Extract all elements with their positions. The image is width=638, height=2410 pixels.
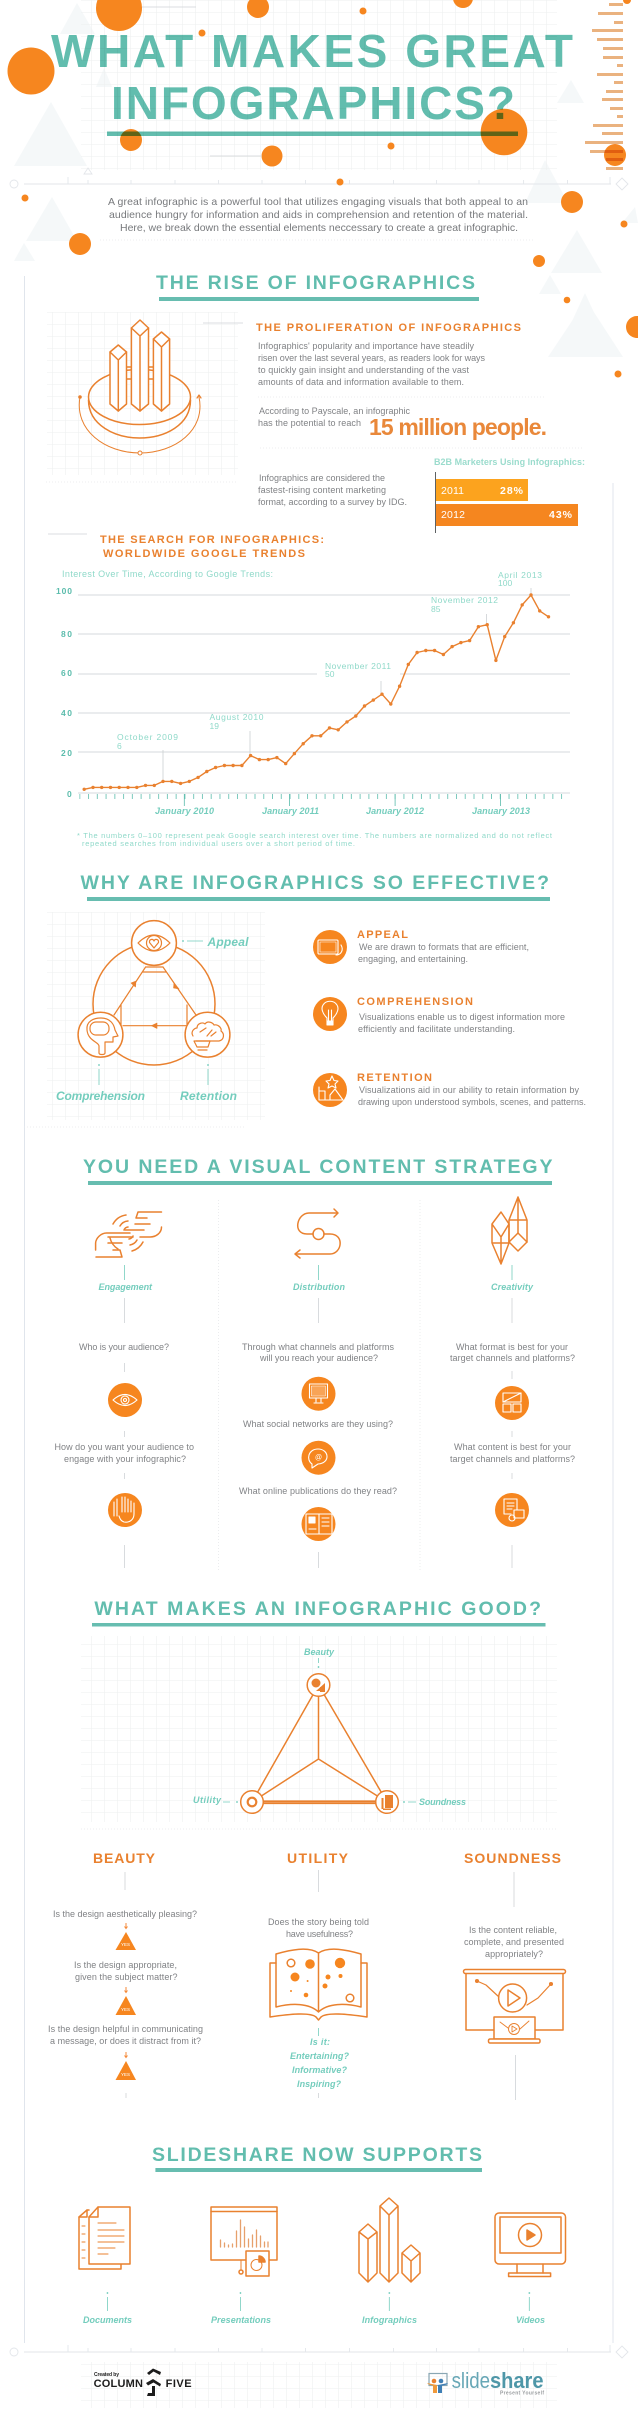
label: distribution: Distribution: [293, 1282, 346, 1292]
question: content: What content is best for your: [454, 1442, 571, 1452]
bar chart: B2B marketers: 28%: [500, 485, 524, 497]
diagram labels: [56, 935, 249, 1103]
icon: beauty shapes: [312, 1678, 325, 1692]
side bar pattern: [585, 3, 623, 170]
bar chart: B2B marketers: 2012: [441, 509, 465, 521]
pyramid labels: Soundness: [419, 1797, 466, 1807]
big stat: 15 million people.: [369, 414, 547, 440]
icon: screen with video: [464, 1970, 566, 2043]
question 3: [48, 2024, 203, 2046]
icon: retention scene: [313, 1073, 347, 1107]
data line: [84, 595, 548, 789]
diagram labels: Retention: [180, 1089, 237, 1103]
data annotations: [117, 570, 542, 751]
question: complete, and presented: [464, 1937, 564, 1947]
chart footnote: * The numbers 0–100 represent peak Google search interest over time. The numbers are normalized and do not reflect: [77, 831, 553, 840]
icon: documents: [79, 2207, 130, 2269]
questions list: Informative?: [292, 2065, 348, 2075]
bar chart: B2B marketers: 2011: [441, 485, 464, 497]
question 2: given the subject matter?: [75, 1972, 178, 1982]
comprehension text: COMPREHENSION: [357, 996, 473, 1008]
icon: hand: [108, 1493, 142, 1527]
icon: brain: [192, 1022, 223, 1050]
panel: creativity column: [450, 1197, 575, 1568]
data annotations: April 2013: [498, 570, 542, 580]
logo: column five: Created by: [94, 2372, 119, 2378]
panel: distribution column: [239, 1209, 397, 1568]
question: Does the story being told: [268, 1917, 369, 1927]
heading: visual content strategy: YOU NEED A VISUAL CONTENT STRATEGY: [83, 1156, 552, 1178]
icon: eye: [108, 1383, 142, 1417]
search heading: THE SEARCH FOR INFOGRAPHICS:: [100, 534, 324, 546]
question: content: target channels and platforms?: [450, 1454, 575, 1464]
search heading: WORLDWIDE GOOGLE TRENDS: [103, 548, 305, 560]
icon: book stack: [382, 1795, 393, 1810]
logo: column five: FIVE: [166, 2378, 192, 2390]
question: appropriately?: [485, 1949, 543, 1959]
y axis labels: 80: [61, 629, 72, 639]
icon: eye: [138, 935, 170, 951]
bottom ruler: [10, 2345, 628, 2358]
y axis labels: 60: [61, 668, 72, 678]
support labels: Videos: [516, 2315, 545, 2325]
label: creativity: Creativity: [491, 1282, 534, 1292]
beauty heading: BEAUTY: [93, 1850, 156, 1866]
proliferation text: to quickly gain insight and understanding of the vast: [258, 365, 469, 375]
y axis labels: [56, 586, 72, 799]
intro paragraph: [108, 196, 528, 234]
callout line: [203, 322, 243, 324]
question: format: [450, 1342, 575, 1363]
question 2: Is the design appropriate,: [74, 1960, 177, 1970]
intro paragraph: Here, we break down the essential elements neccessary to create a great infographic.: [120, 222, 518, 234]
question: channels: [242, 1342, 394, 1363]
data annotations: August 2010: [210, 712, 264, 722]
appeal text: We are drawn to formats that are efficient,: [359, 942, 529, 952]
intro paragraph: audience hungry for information and aids in comprehension and retention of the material.: [109, 209, 528, 221]
line chart: google trends: [56, 570, 570, 816]
x axis labels: [155, 806, 530, 816]
retention text: Visualizations aid in our ability to retain information by: [359, 1085, 580, 1095]
icon: layout: [495, 1386, 529, 1420]
icon: speech bubble: @: [315, 1454, 322, 1462]
background triangles: [14, 3, 638, 357]
y axis labels: 20: [61, 748, 72, 758]
questions list: [290, 2037, 350, 2089]
footer grid: [81, 2362, 557, 2408]
label: engagement: Engagement: [98, 1282, 153, 1292]
y axis labels: 100: [56, 586, 72, 596]
question: Is the content reliable,: [469, 1925, 557, 1935]
panel: utility: [268, 1850, 369, 2098]
question 2: [74, 1960, 178, 1982]
payscale text: According to Payscale, an infographic: [259, 406, 410, 416]
icon: magazine: [302, 1507, 336, 1541]
icon: comprehension bulb: [313, 997, 347, 1031]
page frame lines: [24, 276, 613, 2343]
heading: the rise of infographics: THE RISE OF INFOGRAPHICS: [156, 272, 475, 294]
retention text: RETENTION: [357, 1072, 432, 1084]
proliferation text: Infographics' popularity and importance have steadily: [258, 341, 474, 351]
appeal text: APPEAL: [357, 929, 408, 941]
diagram: pyramid: [241, 1674, 398, 1813]
icon: head: [87, 1018, 118, 1054]
bar chart: B2B marketers: [436, 472, 578, 533]
comprehension text: Visualizations enable us to digest information more: [359, 1012, 565, 1022]
question: format: target channels and platforms?: [450, 1353, 575, 1363]
logo: slideshare: [427, 2368, 544, 2396]
heading: what makes good: WHAT MAKES AN INFOGRAPHIC GOOD?: [94, 1598, 541, 1620]
data annotations: October 2009: [117, 732, 178, 742]
callout lines near title: [142, 7, 262, 156]
decorative orange dots: [8, 0, 638, 378]
x axis labels: January 2012: [366, 806, 424, 816]
chart footnote: [77, 831, 553, 848]
question: social: What social networks are they using?: [243, 1419, 393, 1429]
chart subtitle: Interest Over Time, According to Google Trends:: [62, 569, 273, 579]
question: how: [54, 1442, 194, 1464]
top grid: [81, 0, 557, 170]
y axis labels: 40: [61, 708, 72, 718]
panel: soundness: [464, 1850, 566, 2100]
icon: monitor: [302, 1377, 336, 1411]
icon: gear: [248, 1798, 256, 1806]
utility heading: UTILITY: [287, 1850, 349, 1866]
panel: beauty: [48, 1850, 203, 2098]
logo: column five: COLUMN: [94, 2378, 143, 2390]
question: [464, 1925, 564, 1959]
yes marker 1: [116, 1923, 136, 1950]
yes marker 2: YES: [121, 2007, 130, 2012]
IDG text: format, according to a survey by IDG.: [258, 497, 407, 507]
icon: documents: [495, 1493, 529, 1527]
proliferation heading: THE PROLIFERATION OF INFOGRAPHICS: [256, 322, 521, 334]
yes marker 3: [116, 2052, 136, 2080]
yes marker 1: YES: [121, 1942, 130, 1947]
appeal text: engaging, and entertaining.: [358, 954, 468, 964]
yes marker 2: [116, 1987, 136, 2015]
column dividers: [218, 1200, 420, 1570]
icon: open book: [270, 1949, 367, 2020]
question: content: [450, 1442, 575, 1464]
panel: pyramid grid: [81, 1636, 557, 1822]
icon: crystals on disc: [78, 320, 201, 455]
icon: hands and target: [96, 1212, 162, 1257]
questions list: Is it:: [310, 2037, 330, 2047]
y axis labels: 0: [67, 789, 72, 799]
top ruler: [10, 168, 628, 190]
support labels: Presentations: [211, 2315, 271, 2325]
x axis ticks: [79, 794, 562, 806]
support labels: Documents: [83, 2315, 132, 2325]
IDG text: fastest-rising content marketing: [258, 485, 386, 495]
support labels: [83, 2292, 545, 2325]
question: [268, 1917, 369, 1939]
IDG text: Infographics are considered the: [259, 473, 385, 483]
comprehension text: [357, 996, 565, 1034]
payscale text: has the potential to reach: [258, 418, 361, 428]
title: WHAT MAKES GREAT: [51, 25, 573, 77]
title: INFOGRAPHICS?: [111, 77, 515, 129]
icon: video monitor: [495, 2213, 566, 2276]
question: channels: Through what channels and platforms: [242, 1342, 394, 1352]
annotation leaders: [163, 588, 531, 781]
question: channels: will you reach your audience?: [259, 1353, 378, 1363]
logo: slideshare: slide: [452, 2368, 490, 2393]
retention text: drawing upon understood symbols, scenes, and patterns.: [358, 1097, 586, 1107]
diagram labels: Appeal: [206, 935, 249, 949]
pyramid labels: Utility: [193, 1795, 222, 1805]
questions list: Entertaining?: [290, 2051, 350, 2061]
proliferation text: [258, 341, 486, 387]
title: [51, 25, 573, 136]
support labels: Infographics: [362, 2315, 417, 2325]
bar chart: B2B marketers: 43%: [549, 509, 573, 521]
panel: effectiveness grid: [47, 912, 265, 1120]
panel: engagement column: [54, 1212, 194, 1568]
comprehension text: efficiently and facilitate understanding.: [358, 1024, 515, 1034]
yes marker 3: YES: [121, 2072, 130, 2077]
chart gridlines: [78, 595, 570, 793]
x axis labels: January 2013: [472, 806, 530, 816]
question 1: Is the design aesthetically pleasing?: [53, 1909, 197, 1919]
panel: crystal grid: [47, 312, 238, 475]
heading: why effective: WHY ARE INFOGRAPHICS SO EFFECTIVE?: [80, 872, 549, 894]
search heading: [100, 534, 324, 560]
data annotations: 50: [325, 669, 335, 679]
question: have usefulness?: [286, 1929, 353, 1939]
data annotations: 6: [117, 741, 122, 751]
IDG text: [258, 473, 407, 507]
logo: slideshare: share: [490, 2368, 544, 2393]
diagram labels: Comprehension: [56, 1089, 145, 1103]
pyramid labels: Beauty: [304, 1647, 335, 1657]
x axis labels: January 2011: [262, 806, 319, 816]
heading: slideshare supports: SLIDESHARE NOW SUPPORTS: [152, 2144, 482, 2166]
icon: appeal tablet: [313, 930, 347, 964]
icon: S route: [295, 1209, 340, 1258]
question: format: What format is best for your: [456, 1342, 568, 1352]
proliferation text: amounts of data and information available to them.: [258, 377, 464, 387]
icon: crystals: [492, 1197, 527, 1264]
questions list: Inspiring?: [297, 2079, 342, 2089]
logo: slideshare: Present Yourself: [500, 2390, 544, 2396]
appeal text: [357, 929, 529, 964]
retention text: [357, 1072, 586, 1107]
payscale text: [258, 406, 410, 428]
question: who: Who is your audience?: [79, 1342, 169, 1352]
question 3: a message, or does it distract from it?: [50, 2036, 201, 2046]
logo: column five: [94, 2368, 192, 2396]
question: publications: What online publications do they read?: [239, 1486, 397, 1496]
question: how: How do you want your audience to: [54, 1442, 194, 1452]
chart footnote: repeated searches from individual users over a short period of time.: [82, 839, 355, 848]
x axis labels: January 2010: [155, 806, 214, 816]
question 3: Is the design helpful in communicating: [48, 2024, 203, 2034]
data annotations: 85: [431, 604, 441, 614]
data annotations: November 2011: [325, 661, 391, 671]
bar chart title: B2B Marketers Using Infographics:: [434, 457, 585, 467]
diagram: appeal comprehension retention: [78, 921, 230, 1065]
soundness heading: SOUNDNESS: [464, 1850, 561, 1866]
icon: presentations: [211, 2207, 277, 2276]
icon: speech bubble: [302, 1441, 336, 1475]
intro paragraph: A great infographic is a powerful tool that utilizes engaging visuals that both appeal to an: [108, 196, 528, 208]
data annotations: 19: [210, 721, 219, 731]
pyramid labels: [193, 1647, 466, 1807]
data annotations: 100: [498, 578, 512, 588]
data annotations: November 2012: [431, 595, 498, 605]
question: how: engage with your infographic?: [64, 1454, 186, 1464]
icon: infographics crystals: [359, 2198, 420, 2282]
proliferation text: risen over the last several years, as readers look for ways: [258, 353, 486, 363]
